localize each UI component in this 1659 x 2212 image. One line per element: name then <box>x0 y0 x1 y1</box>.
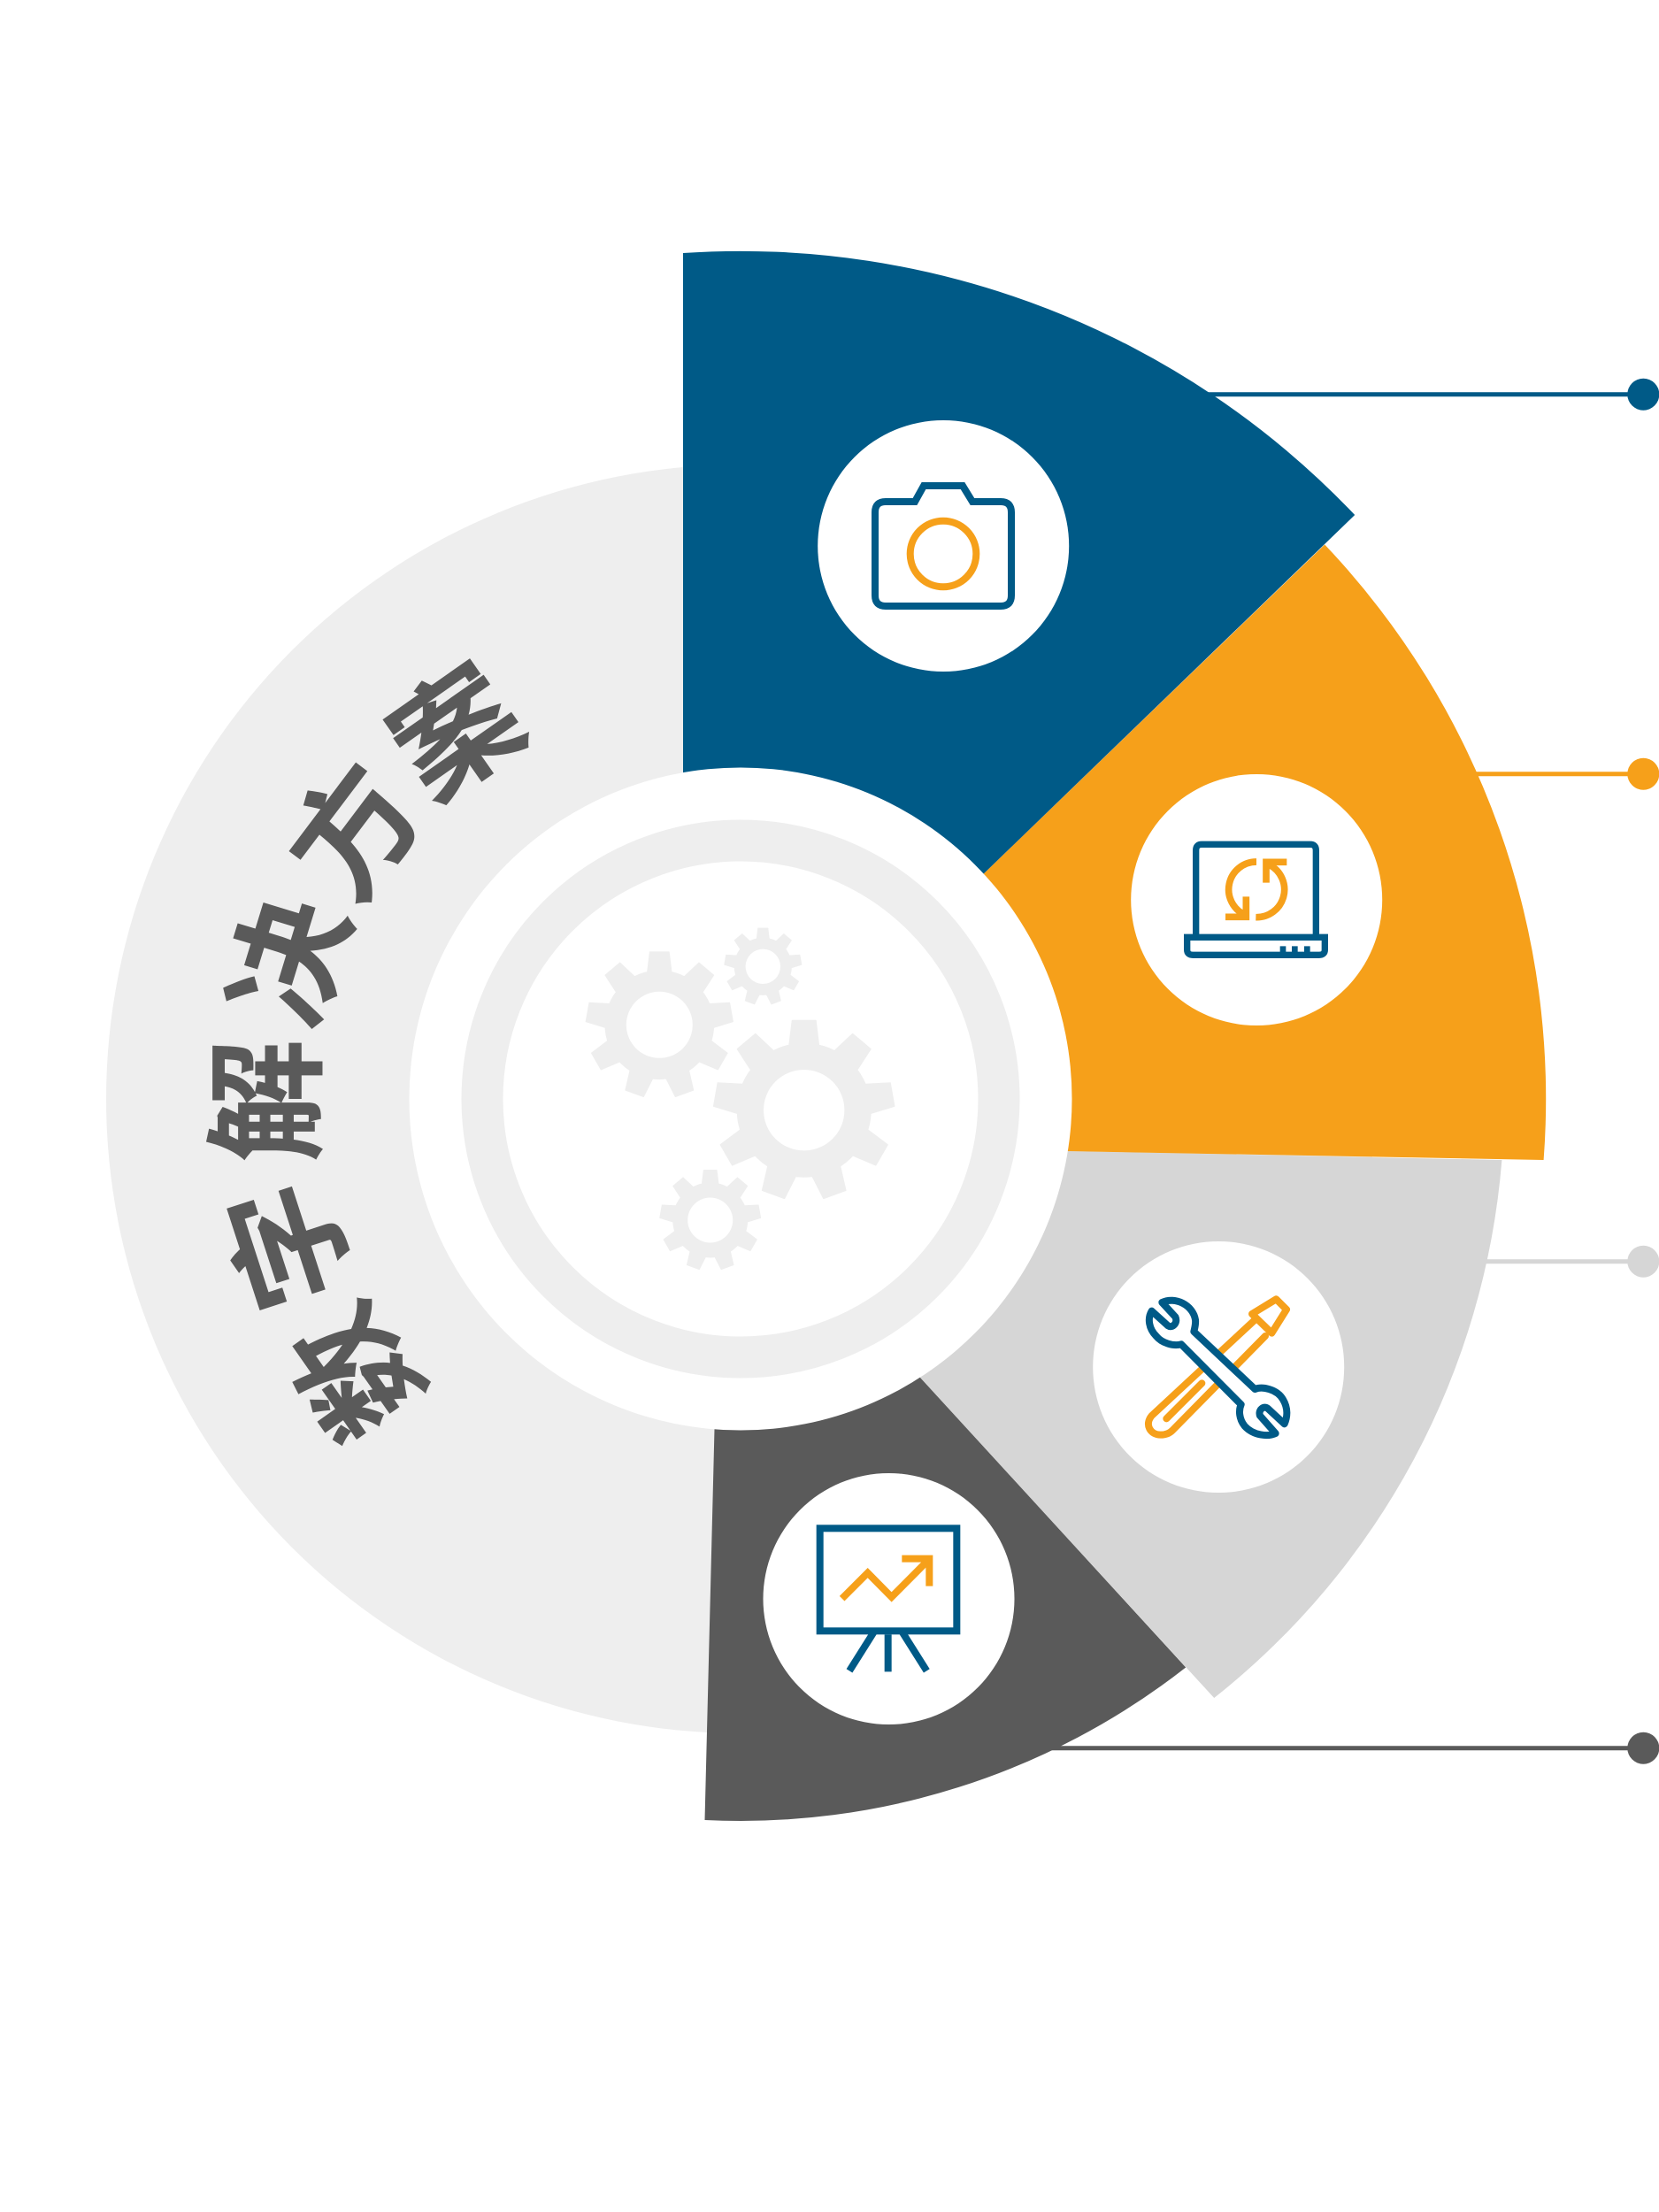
sector: blue <box>683 251 1355 1099</box>
title: curved text: 数字解决方案 <box>199 641 548 1461</box>
sector: orange <box>741 545 1546 1160</box>
icon: gears <box>586 928 895 1270</box>
icon: laptop with sync arrows in white circle <box>1131 774 1382 1025</box>
panel: background disc <box>106 465 1375 1733</box>
icon: presentation board in white circle <box>763 1473 1014 1724</box>
sector: dark grey <box>704 1099 1186 1821</box>
connector: orange line and dot <box>1416 758 1659 790</box>
icon: camera in white circle <box>818 420 1069 672</box>
connector: dark grey line and dot <box>973 1732 1659 1764</box>
connector: light grey line and dot <box>1416 1246 1659 1278</box>
connector: blue line and dot <box>1150 379 1659 411</box>
sector: light grey <box>741 1099 1502 1698</box>
icon: wrench and screwdriver in white circle <box>1093 1241 1344 1493</box>
hub: central white circle with ring <box>409 768 1072 1430</box>
